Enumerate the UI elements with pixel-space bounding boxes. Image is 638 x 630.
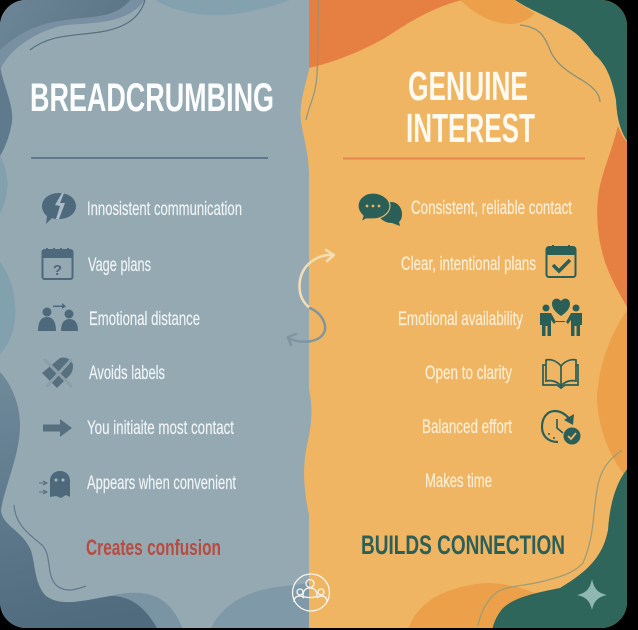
title: Genuine Interest: GENUINE	[408, 63, 528, 109]
connector arrow: top part	[299, 250, 334, 308]
text: you initiate most contact: You initiaite most contact	[87, 417, 234, 439]
text: appears when convenient: Appears when convenient	[87, 472, 236, 494]
panel: breadcrumbing background	[0, 0, 330, 630]
connector arrow: bottom part	[288, 308, 325, 345]
divider: right	[343, 158, 585, 160]
icon: broken speech bubble	[42, 193, 76, 224]
left list	[38, 193, 242, 498]
text: inconsistent communication: Innosistent communication	[87, 198, 242, 220]
title: Breadcrumbing: BREADCRUMBING	[30, 76, 274, 120]
icon: people in circle badge	[292, 574, 330, 611]
icon: calendar with question mark	[42, 248, 73, 279]
icon: clock with check	[542, 411, 580, 444]
text: avoids labels: Avoids labels	[89, 362, 165, 384]
icon: two people with distance arrow	[38, 303, 78, 331]
decorative curve: bottom right	[478, 450, 622, 625]
icon: calendar with question mark: ?	[53, 262, 62, 279]
text: vague plans: Vage plans	[88, 254, 151, 276]
text: clear plans: Clear, intentional plans	[401, 253, 536, 275]
icon: two people and heart	[540, 299, 582, 336]
divider: left	[31, 157, 268, 159]
star sparkle	[577, 579, 607, 610]
text: makes time: Makes time	[425, 470, 492, 492]
decorative curve: bottom left	[14, 505, 86, 590]
text: emotional availability: Emotional availability	[398, 308, 523, 330]
icon: one-way arrow	[43, 419, 72, 437]
panel: genuine interest background	[301, 0, 630, 630]
icon: open book	[543, 360, 578, 388]
right list	[358, 193, 582, 492]
title: Genuine Interest: INTEREST	[406, 105, 535, 151]
icon: crossed-out label	[42, 357, 73, 388]
icon: chat bubbles	[358, 193, 402, 226]
text: open to clarity: Open to clarity	[425, 362, 512, 384]
summary: creates confusion: Creates confusion	[86, 535, 221, 560]
text: emotional distance: Emotional distance	[89, 308, 200, 330]
icon: calendar with check	[546, 245, 576, 277]
icon: ghost	[39, 471, 70, 498]
decorative curve: top right	[520, 25, 600, 102]
text: balanced effort: Balanced effort	[422, 416, 512, 438]
decorative curve: top centre	[306, 0, 318, 120]
title: Genuine Interest	[406, 63, 535, 151]
decorative curve: top left	[30, 0, 145, 50]
